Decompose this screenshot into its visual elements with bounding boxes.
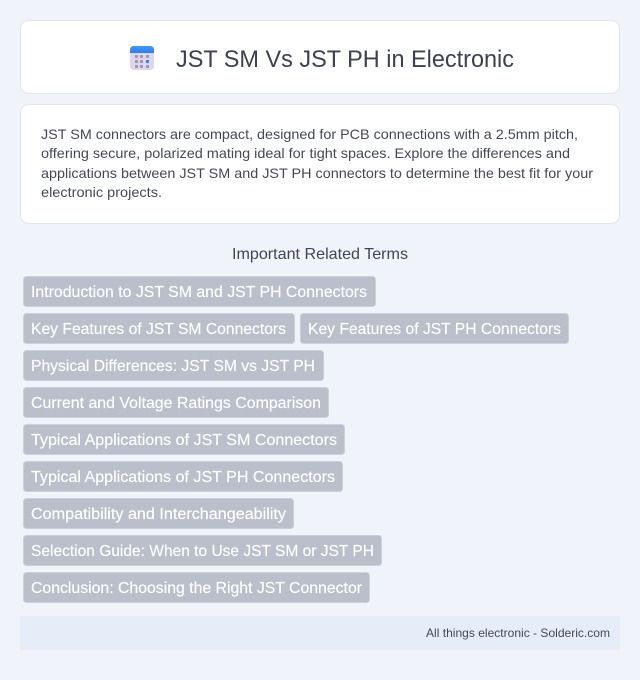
panel: intro paragraph: electronic projects. <box>41 184 162 200</box>
chip: physical differences: Physical Differences: JST SM vs JST PH <box>31 358 315 375</box>
chip: applications SM <box>24 424 344 454</box>
icon: calendar <box>130 46 154 70</box>
chip: introduction: Introduction to JST SM and JST PH Connectors <box>31 284 367 301</box>
panel: intro paragraph: applications between JST SM and JST PH connectors to determine the best fit for your <box>41 165 593 181</box>
chip: key features PH: Key Features of JST PH Connectors <box>308 321 561 338</box>
chip: introduction <box>24 276 376 306</box>
title: JST SM Vs JST PH in Electronic <box>176 46 514 73</box>
chip: physical differences <box>24 350 324 380</box>
chip: ratings comparison <box>24 388 328 418</box>
chip: compatibility: Compatibility and Interchangeability <box>31 506 286 523</box>
chip: conclusion <box>24 572 370 602</box>
panel: intro paragraph: offering secure, polarized mating ideal for tight spaces. Explore the differences and <box>41 145 570 161</box>
chip: selection guide: Selection Guide: When to Use JST SM or JST PH <box>31 543 374 560</box>
panel: intro paragraph: JST SM connectors are compact, designed for PCB connections with a 2.5mm pitch, <box>41 126 578 142</box>
chip: conclusion: Conclusion: Choosing the Right JST Connector <box>31 580 363 597</box>
chip: applications SM: Typical Applications of JST SM Connectors <box>31 432 337 449</box>
chip: key features SM <box>24 314 294 344</box>
chip: ratings comparison: Current and Voltage Ratings Comparison <box>31 395 321 412</box>
footer: All things electronic - Solderic.com <box>426 626 610 640</box>
chip: key features SM: Key Features of JST SM Connectors <box>31 321 286 338</box>
chip: applications PH <box>24 462 342 492</box>
heading: related terms: Important Related Terms <box>232 246 408 263</box>
list of related term chips <box>24 276 568 602</box>
chip: selection guide <box>24 536 382 566</box>
footer <box>20 616 620 650</box>
chip: key features PH <box>300 314 568 344</box>
panel: title card <box>20 20 620 94</box>
chip: applications PH: Typical Applications of JST PH Connectors <box>31 469 335 486</box>
chip: compatibility <box>24 498 294 528</box>
panel: intro paragraph <box>20 104 620 224</box>
